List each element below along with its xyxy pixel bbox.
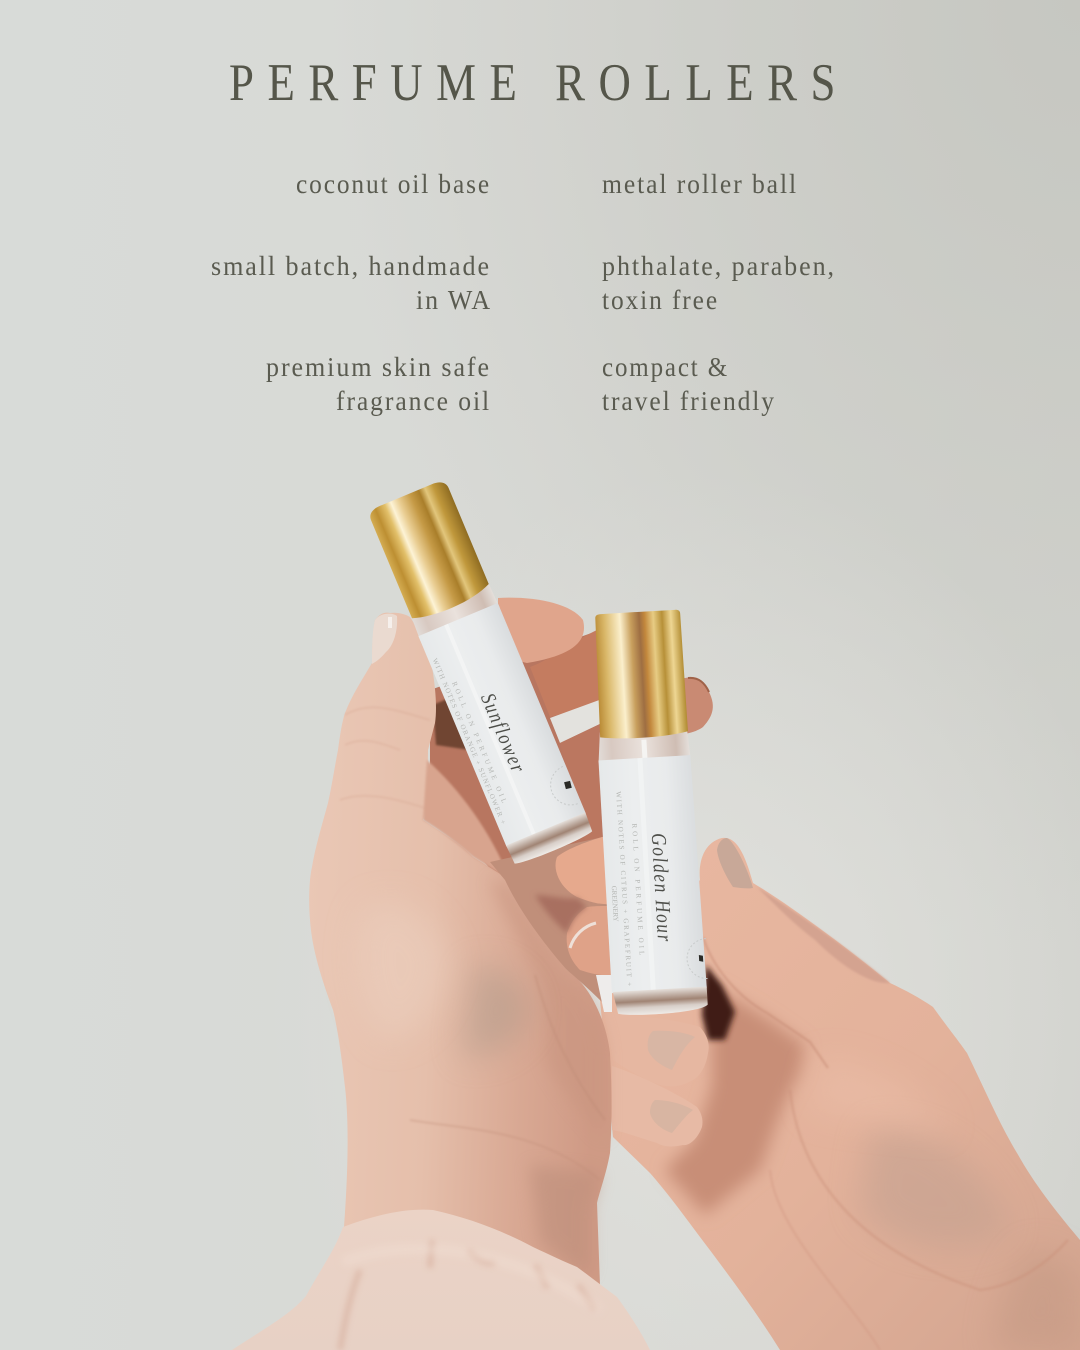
- text block: right features: compact &: [602, 352, 729, 382]
- text block: right features: metal roller ball: [602, 169, 798, 199]
- back finger strip: [757, 887, 890, 983]
- text block: left features: in WA: [416, 285, 492, 315]
- fingernail: left thumb: [372, 614, 397, 664]
- inner fold shade: [490, 880, 605, 1140]
- bottle: Golden Hour: [590, 609, 710, 1017]
- palm creases: [703, 937, 828, 1068]
- right index finger: [604, 1012, 709, 1086]
- wrist shade: [530, 1165, 600, 1275]
- sleeve gathers: [340, 1240, 595, 1350]
- grey tendon shade: [462, 967, 530, 1056]
- bottle: Sunflower: [366, 478, 594, 867]
- glass neck: [597, 727, 690, 762]
- script name: Sunflower: [476, 689, 531, 777]
- text block: left features: coconut oil base: [296, 169, 491, 199]
- text block: right features: travel friendly: [602, 386, 776, 416]
- wrist crease lines: [410, 1120, 600, 1180]
- bottle: Golden Hour: GREENERY: [610, 886, 620, 922]
- bottle: Golden Hour: WITH NOTES OF CITRUS + GRAPEFRUIT +: [614, 791, 634, 986]
- palm highlight: [357, 903, 450, 1040]
- dark crevice: [702, 965, 735, 1040]
- small print: ROLL ON PERFUME OIL: [450, 680, 508, 804]
- fingernail: right thumb: [717, 838, 753, 888]
- label: [418, 603, 586, 846]
- seal: [686, 939, 708, 980]
- small print: ROLL ON PERFUME OIL: [630, 823, 646, 956]
- seal: [544, 766, 578, 811]
- thenar shade: [860, 1129, 1010, 1247]
- title: PERFUME ROLLERS: [229, 54, 849, 112]
- palm hollow shade: [665, 985, 805, 1215]
- label: [598, 755, 707, 993]
- text block: left features: small batch, handmade: [211, 251, 491, 281]
- left hand palm and thumb: [309, 613, 612, 1285]
- text block: right features: [602, 169, 836, 416]
- photo: hands holding rollers: [232, 478, 1080, 1350]
- back fingers of left hand: [430, 598, 713, 880]
- sleeve: [232, 1210, 650, 1350]
- right hand: [600, 838, 1080, 1350]
- text block: left features: fragrance oil: [336, 386, 491, 416]
- text block: right features: toxin free: [602, 285, 719, 315]
- right middle finger: [612, 1066, 702, 1146]
- text block: right features: phthalate, paraben,: [602, 251, 836, 281]
- thumb wrinkles: [340, 707, 430, 808]
- bottle: Sunflower: WITH NOTES OF ORANGE + SUNFLOWER +: [431, 657, 507, 825]
- left fingertips: [490, 835, 612, 1012]
- glass base: [506, 812, 594, 867]
- fingernail: index: [648, 1031, 695, 1070]
- script name: Golden Hour: [647, 832, 677, 944]
- glass neck: [410, 582, 500, 641]
- glass base: [613, 987, 708, 1017]
- text block: left features: premium skin safe: [266, 352, 491, 382]
- pad below thumb: [423, 760, 510, 880]
- fingernail: middle: [650, 1100, 693, 1133]
- gold cap: [367, 479, 492, 624]
- text block: left features: [211, 169, 492, 416]
- gold cap: [593, 609, 688, 740]
